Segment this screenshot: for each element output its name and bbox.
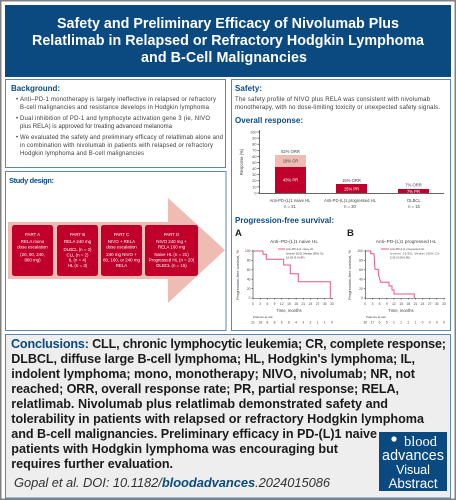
chart B: progressed HL survival: 20 [359, 287, 363, 291]
chart B: progressed HL survival [347, 228, 446, 324]
part B box: IL (n = 4) [69, 258, 87, 263]
chart B: progressed HL survival: 0 [429, 320, 431, 324]
conclusions body [11, 352, 425, 471]
background bullets: • [16, 97, 18, 103]
background bullets: in combination with nivolumab in patients with relapsed or refractory [20, 143, 213, 149]
part A box: 800 mg) [24, 258, 41, 262]
chart A: naive HL survival: 12 [280, 302, 284, 306]
part C box: NIVO + RELA [108, 239, 135, 244]
chart B: progressed HL survival: 0 [436, 320, 438, 324]
bar: DLBCL: 7% ORR [405, 182, 422, 188]
chart A: naive HL survival: 0 [331, 320, 333, 324]
chart B: progressed HL survival: Patients at risk [366, 315, 386, 319]
bar: progressed HL: 15% ORR [342, 178, 361, 183]
conclusions body: relatlimab. Nivolumab plus relatlimab demonstrated safety and [11, 397, 388, 411]
heading: progression-free survival: Progression-free survival: [235, 216, 334, 225]
conclusions body: reached; ORR, overall response rate; PR, partial response; RELA, [11, 382, 399, 396]
conclusions body: tolerability in patients with relapsed or refractory Hodgkin lymphoma [11, 412, 425, 426]
chart A: naive HL survival: 1 [317, 320, 319, 324]
bar: DLBCL [398, 182, 429, 194]
safety text: monotherapy, with no dose-limiting toxicity or unexpected safety signals. [235, 105, 440, 111]
chart A: naive HL survival: 4 [295, 320, 297, 324]
chart B: progressed HL survival: 30 [435, 302, 439, 306]
part A box: dose escalation [17, 244, 48, 250]
chart A: naive HL survival: 3 [259, 302, 261, 306]
chart B: progressed HL survival: 6 [379, 302, 381, 306]
chart B: progressed HL survival: 5 [386, 320, 388, 324]
conclusions body: DLBCL, diffuse large B-cell lymphoma; HL, Hodgkin's lymphoma; IL, [11, 352, 415, 366]
part C box: dose escalation [106, 244, 137, 250]
part D box: DLBCL (n = 15) [156, 263, 187, 268]
chart B: progressed HL survival: 0 [364, 302, 366, 306]
bar chart: overall response: 90 [252, 136, 256, 140]
bar: DLBCL: 7% PR [407, 189, 420, 194]
chart A: naive HL survival: 20 [247, 287, 251, 291]
bar chart: overall response: n = 15 [408, 204, 421, 209]
conclusions body: indolent lymphoma; mono, monotherapy; NIVO, nivolumab; NR, not [11, 367, 416, 381]
chart A: naive HL survival: 21 [251, 320, 255, 324]
title banner: Relatlimab in Relapsed or Refractory Hodgkin Lymphoma [32, 33, 425, 49]
chart A: naive HL survival: 1 [324, 320, 326, 324]
conclusions body: and B-cell malignancies. Preliminary efficacy in PD-(L)1 naive [11, 427, 377, 441]
bar: naive HL [275, 149, 306, 193]
background bullets: plus RELA) is approved for treating advanced melanoma [20, 124, 173, 130]
chart A: naive HL survival: 2 [310, 320, 312, 324]
chart B: progressed HL survival: Anti-PD-(L)1 progressed HL [390, 247, 425, 251]
chart B: progressed HL survival: 12 [392, 302, 396, 306]
heading: safety: Safety: [235, 84, 262, 93]
bar: naive HL: 62% ORR [281, 149, 300, 154]
bar chart: overall response [239, 130, 444, 209]
part C box: 240 mg NIVO + [106, 252, 137, 257]
chart B: progressed HL survival: Anti–PD-(L)1 progressed HL [376, 239, 437, 245]
bar chart: overall response: 10 [252, 185, 256, 189]
chart A: naive HL survival: 60 [247, 268, 251, 272]
chart B: progressed HL survival: 24 [421, 302, 424, 306]
chart B: progressed HL survival: 0 [443, 320, 445, 324]
heading: background: Background: [11, 84, 60, 93]
background bullets: Hodgkin lymphoma and B-cell malignancies [20, 151, 144, 157]
chart B: progressed HL survival: 60 [359, 268, 363, 272]
chart B: progressed HL survival: 1 [407, 320, 409, 324]
bar chart: overall response: 20 [252, 179, 256, 183]
chart B: progressed HL survival: 15 [399, 302, 403, 306]
chart A: naive HL survival: 6 [288, 320, 290, 324]
logo: blood advances visual abstract: advances [382, 448, 444, 464]
chart A: naive HL survival: Progression-free survival, % [235, 250, 240, 300]
part D box: Progressed HL (n = 20) [149, 258, 195, 262]
chart B: progressed HL survival: 18 [406, 302, 410, 306]
title banner: and B-Cell Malignancies [141, 50, 307, 66]
background bullets: Dual inhibition of PD-1 and lymphocyte activation gene 3 (ie, NIVO [20, 116, 210, 122]
bar chart: overall response: n = 20 [344, 204, 357, 209]
logo: blood advances visual abstract: Visual [396, 463, 430, 477]
title banner: Safety and Preliminary Efficacy of Nivolumab Plus [57, 16, 399, 32]
part B box: PART B [70, 232, 85, 237]
conclusions body: requires further evaluation. [11, 457, 173, 471]
background bullets: • [16, 135, 18, 141]
part D box [145, 225, 198, 276]
conclusions body: patients with Hodgkin lymphoma was encouraging but [11, 442, 339, 456]
bar chart: overall response: 0 [254, 191, 256, 195]
bar chart: overall response: 50 [252, 161, 256, 165]
chart A: naive HL survival: Anti-PD-(L)1 naive HL [286, 247, 314, 251]
bar chart: overall response: n = 21 [284, 204, 297, 209]
part D box: Naive HL (n = 21) [154, 252, 189, 257]
chart B: progressed HL survival: 33 [442, 302, 446, 306]
bar chart: overall response: 40 [252, 167, 256, 171]
chart B: progressed HL survival: 6 [379, 320, 381, 324]
safety text [235, 97, 440, 111]
chart A: naive HL survival: 6 [266, 302, 268, 306]
part A box: (20, 80, 240, [20, 252, 45, 257]
chart A: naive HL survival: 0 [252, 302, 254, 306]
chart B: progressed HL survival: 1 [393, 320, 395, 324]
part D box: NIVO 240 mg + [156, 239, 187, 244]
part D box: RELA 160 mg [158, 244, 186, 250]
bar: naive HL: 19% CR [283, 158, 298, 164]
chart B: progressed HL survival: Progression-free survival, % [347, 250, 352, 300]
chart A: naive HL survival: 9 [274, 302, 276, 306]
chart B: progressed HL survival: B [347, 228, 354, 239]
chart A: naive HL survival: 33 [330, 302, 334, 306]
chart A: naive HL survival: 18 [294, 302, 298, 306]
logo: blood advances visual abstract: Abstract [388, 476, 438, 491]
chart B: progressed HL survival: 100 [357, 249, 363, 253]
chart A: naive HL survival: A [235, 228, 242, 239]
heading: overall response: Overall response: [235, 116, 303, 125]
background bullets [16, 97, 223, 157]
chart A: naive HL survival: 40 [247, 277, 251, 281]
panel: background [6, 80, 226, 168]
chart A: naive HL survival: Patients at risk [253, 315, 273, 319]
chart A: naive HL survival: 8 [274, 320, 276, 324]
safety text: The safety profile of NIVO plus RELA was consistent with nivolumab [235, 97, 431, 103]
chart A: naive HL survival: 100 [245, 249, 251, 253]
part C box: 80, 160, or 240 mg [103, 258, 140, 262]
part A box: RELA mono [21, 239, 45, 244]
chart B: progressed HL survival: 0 [422, 320, 424, 324]
logo: blood advances visual abstract: blood [404, 434, 438, 450]
chart A: naive HL survival: 0 [249, 296, 251, 300]
logo: blood advances visual abstract [379, 432, 447, 491]
bar chart: overall response: Anti-PD-(L)1 naive HL [270, 198, 311, 203]
chart B: progressed HL survival: 0 [361, 296, 363, 300]
background bullets: • [16, 116, 18, 122]
part B box: RELA 240 mg [64, 239, 92, 244]
chart A: naive HL survival: 15 [287, 302, 291, 306]
chart A: naive HL survival: 18.69 (5.4-NR) [286, 256, 305, 260]
chart B: progressed HL survival: 17 [371, 320, 374, 324]
panel: safety and results [232, 80, 450, 330]
part C box [101, 225, 142, 276]
chart B: progressed HL survival: (events: 15/20); Median (95% CI): [390, 251, 440, 255]
chart A: naive HL survival: 6 [281, 320, 283, 324]
bar: progressed HL [336, 178, 367, 193]
citation: Gopal et al. DOI: 10.1182/bloodadvances.2024015086 [14, 475, 331, 490]
chart B: progressed HL survival: 27 [428, 302, 432, 306]
background bullets: Anti–PD-1 monotherapy is largely ineffective in relapsed or refractory [20, 97, 216, 103]
bar chart: overall response: 80 [252, 143, 256, 147]
arrow: study timeline [8, 198, 225, 303]
part C box: PART C [114, 232, 129, 237]
part B box: DLBCL (n = 2) [63, 247, 92, 252]
chart A: naive HL survival: 18 [258, 320, 262, 324]
part C box: RELA [116, 263, 127, 268]
chart B: progressed HL survival: 1 [414, 320, 416, 324]
chart A: naive HL survival: 80 [247, 259, 251, 263]
chart B: progressed HL survival: 80 [359, 259, 363, 263]
bar: progressed HL: 15% PR [344, 186, 359, 192]
bar chart: overall response: 60 [252, 155, 256, 159]
panel: study design [6, 172, 226, 330]
panel: conclusions [6, 334, 450, 498]
background bullets: We evaluated the safety and preliminary efficacy of relatlimab alone and [20, 135, 223, 141]
bar chart: overall response: 70 [252, 149, 256, 153]
chart B: progressed HL survival: 21 [414, 302, 417, 306]
chart B: progressed HL survival: 20 [363, 320, 367, 324]
bar chart: overall response: Response (%) [239, 148, 244, 175]
heading: study design: Study design: [9, 176, 54, 185]
part A box [12, 225, 53, 276]
chart A: naive HL survival: 27 [316, 302, 320, 306]
chart B: progressed HL survival: 9 [386, 302, 388, 306]
chart A: naive HL survival: 3 [302, 320, 304, 324]
part B box: CLL (n = 2) [67, 252, 89, 258]
chart B: progressed HL survival: 3 [372, 302, 374, 306]
bar chart: overall response: 100 [250, 130, 256, 134]
chart A: naive HL survival: 8 [266, 320, 268, 324]
title banner [5, 5, 451, 77]
chart A: naive HL survival: (events: 8/21); Median (95% CI): [286, 251, 324, 255]
chart A: naive HL survival: 24 [309, 302, 312, 306]
bar chart: overall response: 30 [252, 173, 256, 177]
conclusions first line: Conclusions: CLL, chronic lymphocytic leukemia; CR, complete response; [11, 337, 446, 351]
part B box [57, 225, 98, 276]
part B box: HL (n = 3) [68, 263, 88, 268]
bar chart: overall response: Anti-PD-(L)1 progressed HL [324, 198, 377, 203]
chart B: progressed HL survival: 5.55 (3.68-6.85) [390, 256, 410, 260]
chart B: progressed HL survival: 40 [359, 277, 363, 281]
bar: naive HL: 43% PR [283, 178, 298, 182]
bar chart: overall response: DLBCL [407, 198, 421, 203]
chart A: naive HL survival: Time, months [276, 308, 302, 313]
part D box: PART D [164, 232, 179, 237]
background bullets: B-cell malignancies and resistance develops in Hodgkin lymphoma [20, 105, 210, 111]
chart B: progressed HL survival: 1 [400, 320, 402, 324]
chart A: naive HL survival [235, 228, 334, 324]
chart A: naive HL survival: Anti–PD-(L)1 naive HL [270, 239, 318, 245]
part A box: PART A [25, 232, 40, 237]
chart A: naive HL survival: 21 [301, 302, 305, 306]
chart B: progressed HL survival: Time, months [388, 308, 414, 313]
chart A: naive HL survival: 30 [323, 302, 327, 306]
